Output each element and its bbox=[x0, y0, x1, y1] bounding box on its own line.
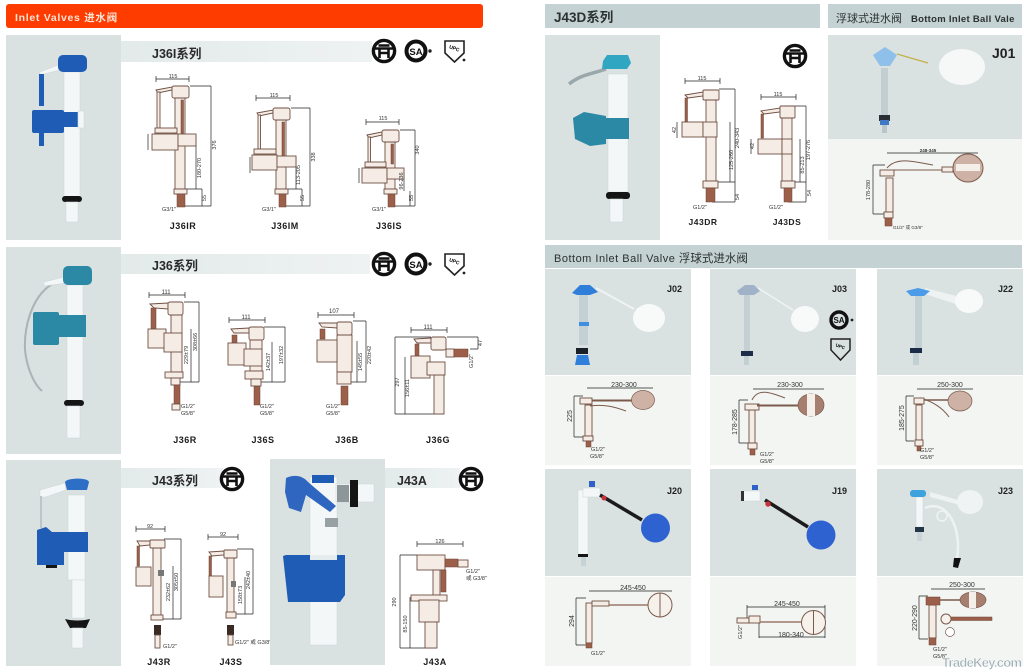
section heading: J43 series bbox=[121, 468, 223, 488]
drawing: J43DR: G1/2" bbox=[693, 205, 707, 211]
card: J02 bbox=[545, 269, 691, 465]
certification logos: J36I: SA bbox=[409, 47, 423, 58]
certification logo: J43A bbox=[460, 468, 482, 490]
drawing: J36R: G5/8" bbox=[181, 411, 195, 417]
card: J03: G5/8" bbox=[760, 459, 774, 465]
drawing: J36B: G5/8" bbox=[326, 411, 340, 417]
card: J20: G1/2" bbox=[591, 651, 605, 657]
section heading: J36I series bbox=[121, 41, 372, 62]
drawing: J43S: G1/2" 或 G3/8" bbox=[235, 638, 271, 646]
drawing: J36S: 111 bbox=[241, 315, 251, 321]
drawing: J36S: 197±32 bbox=[279, 346, 285, 364]
drawing: J36IR: 376 bbox=[212, 140, 218, 150]
drawing: J43S: 242±40 bbox=[246, 571, 252, 589]
drawing: J43DS bbox=[750, 92, 813, 227]
drawing: J36G: 156±11 bbox=[405, 379, 411, 397]
drawing: J36S: 142±37 bbox=[266, 353, 272, 371]
drawing: J43A: 290 bbox=[392, 597, 398, 607]
drawing: J36G: 47 bbox=[478, 340, 484, 346]
drawing: J43DR: J43DR bbox=[689, 217, 717, 227]
card: J22: 250-300 bbox=[937, 382, 963, 389]
drawing: J36IM bbox=[250, 93, 317, 231]
drawing: J43DS: J43DS bbox=[773, 217, 801, 227]
drawing: J43A: 126 bbox=[435, 539, 445, 545]
drawing: J43DS: 54 bbox=[807, 190, 813, 196]
card: J23: J23 bbox=[998, 486, 1013, 496]
header: Inlet Valves bbox=[6, 4, 483, 28]
drawing: J36IR: 115 bbox=[169, 74, 177, 80]
card: J03: UPC bbox=[835, 342, 846, 351]
drawing: J43DS: 197-276 bbox=[806, 140, 812, 160]
drawing: J36IS: 340 bbox=[415, 145, 421, 155]
drawing: J36R: G1/2" bbox=[181, 404, 195, 410]
panel: J36 product photo bbox=[6, 247, 121, 454]
drawing: J43DS: 42 bbox=[750, 143, 756, 149]
section heading: J43A: J43A bbox=[397, 474, 427, 488]
card: J03: SA bbox=[833, 316, 845, 325]
section heading: Bottom Inlet Ball Vale: 浮球式进水阀 Bottom Inlet Ball Vale bbox=[836, 11, 1015, 25]
drawing: J43DS: G1/2" bbox=[769, 205, 783, 211]
card: J22 bbox=[877, 269, 1023, 465]
drawing: J43DS: 85-213 bbox=[800, 156, 806, 174]
section heading: Bottom Inlet Ball Vale bbox=[828, 4, 1022, 28]
card: J02: G1/2" bbox=[591, 447, 605, 453]
panel: J43 product photo bbox=[6, 460, 121, 666]
drawing: J36S bbox=[228, 315, 285, 445]
drawing: J36IS: G3/1" bbox=[372, 207, 386, 213]
drawing: J36R: 229±79 bbox=[184, 346, 190, 364]
drawing: J36IS bbox=[359, 116, 421, 231]
card: J19 bbox=[710, 469, 856, 666]
drawing: J36B: 107 bbox=[329, 309, 340, 315]
card: J20: J20 bbox=[667, 486, 682, 496]
drawing: J43DR: 115 bbox=[698, 76, 706, 82]
card: J01: J01 bbox=[992, 45, 1016, 61]
drawing: J36B: 220±42 bbox=[367, 346, 373, 364]
section heading: J36I series: J36I系列 bbox=[152, 46, 201, 61]
drawing: J36B: 145±55 bbox=[358, 353, 364, 371]
drawing: J43A bbox=[392, 539, 487, 667]
drawing: J36G: 111 bbox=[423, 325, 433, 331]
card: J23: 220-290 bbox=[912, 605, 919, 631]
card: J02: J02 bbox=[667, 284, 682, 294]
drawing: J43R bbox=[136, 524, 181, 667]
header: Inlet Valves: Inlet Valves 进水阀 bbox=[15, 11, 118, 24]
drawing: J43DR: 54 bbox=[735, 194, 741, 200]
card: J19: 245-450 bbox=[774, 601, 800, 608]
drawing: J43S: 92 bbox=[220, 532, 226, 538]
drawing: J36B bbox=[317, 309, 373, 445]
panel: J43D product photo bbox=[545, 35, 660, 240]
drawing: J43R: 232±62 bbox=[166, 583, 172, 601]
section heading: J43 series: J43系列 bbox=[152, 473, 198, 488]
panel: J36I product photo bbox=[6, 35, 121, 240]
section heading: J36 series: J36系列 bbox=[152, 258, 198, 273]
drawing: J36R: 308±66 bbox=[193, 333, 199, 351]
card: J20: 294 bbox=[569, 615, 576, 627]
certification logo: J43 bbox=[221, 468, 243, 490]
drawing: J36IM: J36IM bbox=[271, 221, 299, 231]
drawing: J43DR: 125-260 bbox=[729, 150, 735, 170]
section heading: J43A bbox=[385, 468, 460, 488]
drawing: J36IM: 338 bbox=[311, 152, 317, 162]
drawing: J43A: J43A bbox=[423, 657, 447, 667]
drawing: J36S: G5/8" bbox=[260, 411, 274, 417]
drawing: J36B: G1/2" bbox=[326, 404, 340, 410]
drawing: J36IR: J36IR bbox=[170, 221, 196, 231]
card: J22: 185-275 bbox=[899, 405, 906, 431]
certification logo: J43D bbox=[784, 45, 806, 67]
certification logos: J36I bbox=[373, 40, 465, 62]
drawing: J36IR: 180-270 bbox=[197, 158, 203, 178]
drawing: J43DR: 42 bbox=[672, 127, 678, 133]
drawing: J36IR: G3/1" bbox=[162, 207, 176, 213]
card: J23: G5/8" bbox=[933, 654, 947, 660]
section heading: Bottom Inlet Ball Valve: Bottom Inlet Ball Valve 浮球式进水阀 bbox=[554, 251, 748, 265]
section heading: J43D series: J43D系列 bbox=[554, 9, 613, 25]
drawing: J36IR: 55 bbox=[202, 195, 208, 201]
card: J19: 180-340 bbox=[778, 632, 804, 639]
drawing: J36IM: G3/1" bbox=[262, 207, 276, 213]
drawing: J36IM: 115 bbox=[270, 93, 278, 99]
drawing: J43A: 85-150 bbox=[403, 615, 409, 633]
certification logos: J36: UPC bbox=[448, 257, 461, 267]
section heading: Bottom Inlet Ball Valve bbox=[545, 245, 1022, 268]
drawing: J36G: G1/2" bbox=[469, 354, 475, 368]
card: J03: J03 bbox=[832, 284, 847, 294]
drawing: J36IS: 96-236 bbox=[399, 172, 405, 190]
card: J01 bbox=[828, 35, 1022, 240]
card: J19: J19 bbox=[832, 486, 847, 496]
watermark: TradeKey.com bbox=[942, 655, 1022, 670]
drawing: J36S: J36S bbox=[251, 435, 275, 445]
drawing: J36B: J36B bbox=[335, 435, 359, 445]
certification logos: J36 bbox=[373, 253, 465, 275]
section heading: J36 series bbox=[121, 254, 370, 274]
drawing: J36S: G1/2" bbox=[260, 404, 274, 410]
drawing: J36G: 297 bbox=[395, 377, 401, 387]
drawing: J36IM: 113-205 bbox=[296, 165, 302, 185]
drawing: J43DR: 240-343 bbox=[735, 128, 741, 148]
drawing: J43R: G1/2" bbox=[163, 644, 177, 650]
drawing: J43A: 或 G3/8" bbox=[466, 574, 487, 582]
card: J01: 248-345 bbox=[920, 148, 937, 153]
card: J22: G5/8" bbox=[920, 455, 934, 461]
drawing: J43R: 92 bbox=[147, 524, 153, 530]
card: J03 bbox=[710, 269, 856, 465]
drawing: J36IR bbox=[148, 74, 218, 231]
drawing: J36IS: 55 bbox=[409, 195, 415, 201]
drawing: J43S bbox=[208, 532, 271, 667]
drawing: J36G: J36G bbox=[426, 435, 450, 445]
drawing: J36IS: 115 bbox=[379, 116, 387, 122]
drawing: J43S: J43S bbox=[219, 657, 243, 667]
drawing: J43A: G1/2" bbox=[466, 569, 480, 575]
drawing: J36G bbox=[395, 325, 484, 445]
panel: J43A product photo bbox=[270, 459, 385, 665]
card: J22: J22 bbox=[998, 284, 1013, 294]
card: J03: 230-300 bbox=[777, 382, 803, 389]
drawing: J36R: J36R bbox=[173, 435, 197, 445]
card: J01: 178-280 bbox=[866, 180, 872, 200]
drawing: J43R: 305±50 bbox=[174, 573, 180, 591]
card: J02: G5/8" bbox=[590, 454, 604, 460]
card: J03: 178-285 bbox=[732, 409, 739, 435]
drawing: J36R: 111 bbox=[161, 290, 171, 296]
card: J23: G1/2" bbox=[933, 647, 947, 653]
card: J01: G1/2" 或 G3/8" bbox=[893, 224, 923, 230]
card: J19: G1/2" bbox=[738, 625, 744, 639]
card: J23: 250-300 bbox=[949, 582, 975, 589]
drawing: J43DS: 115 bbox=[774, 92, 782, 98]
card: J20: 245-450 bbox=[620, 585, 646, 592]
card: J22: G1/2" bbox=[920, 448, 934, 454]
drawing: J36IS: J36IS bbox=[376, 221, 402, 231]
card: J20 bbox=[545, 469, 691, 666]
card: J03: G1/2" bbox=[760, 452, 774, 458]
card: J23 bbox=[877, 469, 1023, 666]
card: J02: 225 bbox=[567, 410, 574, 422]
drawing: J36IM: 55 bbox=[300, 195, 306, 201]
card: J02: 230-300 bbox=[611, 382, 637, 389]
certification logos: J36: SA bbox=[409, 260, 423, 271]
drawing: J43DR bbox=[672, 76, 741, 227]
certification logos: J36I: UPC bbox=[448, 44, 461, 54]
drawing: J43R: J43R bbox=[147, 657, 171, 667]
drawing: J43S: 158±73 bbox=[238, 586, 244, 604]
section heading: J43D series bbox=[545, 4, 820, 28]
drawing: J36R bbox=[148, 290, 199, 445]
